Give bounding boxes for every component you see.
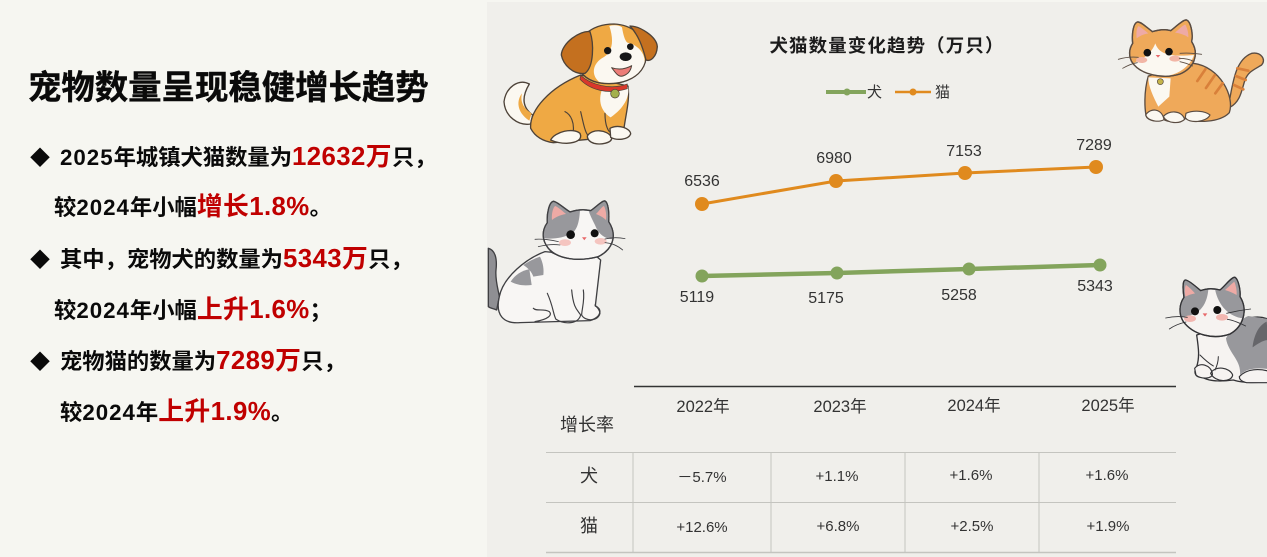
bullet line 2 continuation: 较2024年小幅上升1.6%； <box>54 296 332 324</box>
line chart: cats: 6980 <box>816 150 852 167</box>
growth rate table: +6.8% <box>817 518 859 535</box>
icon: grey cat left <box>488 201 625 323</box>
growth rate table: +1.6% <box>1086 467 1128 484</box>
line chart: dogs: 5258 <box>941 287 977 304</box>
bullet line 1: ◆ 2025年城镇犬猫数量为12632万只， <box>30 143 437 171</box>
line chart: cats: 6536 <box>684 173 720 190</box>
growth rate table: +12.6% <box>676 519 728 536</box>
icon: grey cat right <box>1166 277 1267 383</box>
line chart: dogs: 5119 <box>680 289 714 306</box>
line chart: dogs <box>680 258 1113 307</box>
line chart: cats: 7289 <box>1076 137 1112 154</box>
chart legend: 犬 <box>867 84 882 101</box>
bullet line 3 continuation: 较2024年上升1.9%。 <box>60 398 293 426</box>
chart title: 犬猫数量变化趋势（万只） <box>769 35 1005 56</box>
growth rate table: －5.7% <box>677 469 727 486</box>
bullet line 2: ◆ 其中，宠物犬的数量为5343万只， <box>30 245 413 273</box>
growth rate table: +2.5% <box>951 518 993 535</box>
growth rate table: 犬 <box>580 466 598 486</box>
chart legend <box>826 84 950 101</box>
growth rate table: 2022年 <box>676 397 730 416</box>
growth rate table: 增长率 <box>560 415 614 435</box>
growth rate table: 猫 <box>580 516 598 536</box>
growth rate table: 2023年 <box>813 397 867 416</box>
growth rate table: +1.9% <box>1087 518 1129 535</box>
line chart: cats <box>684 137 1112 211</box>
line chart: dogs: 5175 <box>808 290 844 307</box>
text block: bullet points <box>30 143 437 426</box>
growth rate table: +1.1% <box>816 468 858 485</box>
line chart: dogs: 5343 <box>1077 278 1113 295</box>
icon: dog <box>504 24 657 144</box>
title: 宠物数量呈现稳健增长趋势 <box>28 70 429 107</box>
growth rate table: +1.6% <box>950 467 992 484</box>
bullet line 3: ◆ 宠物猫的数量为7289万只， <box>30 347 346 375</box>
line chart: cats: 7153 <box>946 143 982 160</box>
bullet line 1 continuation: 较2024年小幅增长1.8%。 <box>54 193 332 221</box>
growth rate table <box>546 386 1176 552</box>
growth rate table: 2025年 <box>1081 396 1135 415</box>
growth rate table: 2024年 <box>947 396 1001 415</box>
panel: right background <box>487 2 1267 557</box>
chart legend: 猫 <box>935 84 950 101</box>
icon: orange cat <box>1118 20 1263 123</box>
